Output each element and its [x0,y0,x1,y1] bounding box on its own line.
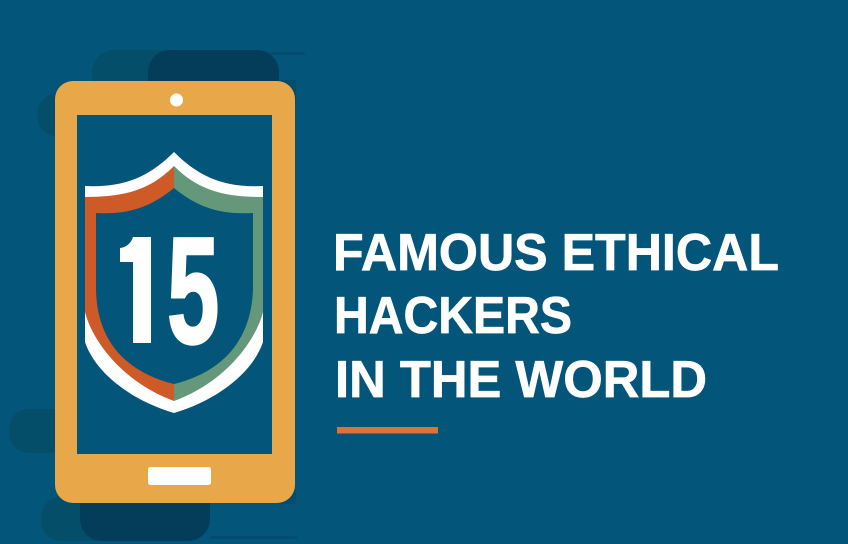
title: IN THE WORLD [335,351,707,409]
title [333,224,779,409]
number 15: 5 [167,206,219,375]
shield white outline [85,152,263,413]
icon: smartphone [55,81,295,503]
phone screen [77,115,272,454]
title: FAMOUS ETHICAL [333,224,779,282]
number 15 [120,237,218,346]
shield inner field [96,188,253,384]
shield green half [174,166,263,401]
number 15: 1 [100,206,185,376]
title: HACKERS [334,287,572,345]
shield orange half [85,166,174,401]
icon: shield with number 15 [85,152,263,413]
accent underline [337,427,438,434]
phone camera [170,94,183,106]
phone body [55,81,295,503]
background shadow shapes [9,50,305,541]
phone home button [148,467,211,485]
